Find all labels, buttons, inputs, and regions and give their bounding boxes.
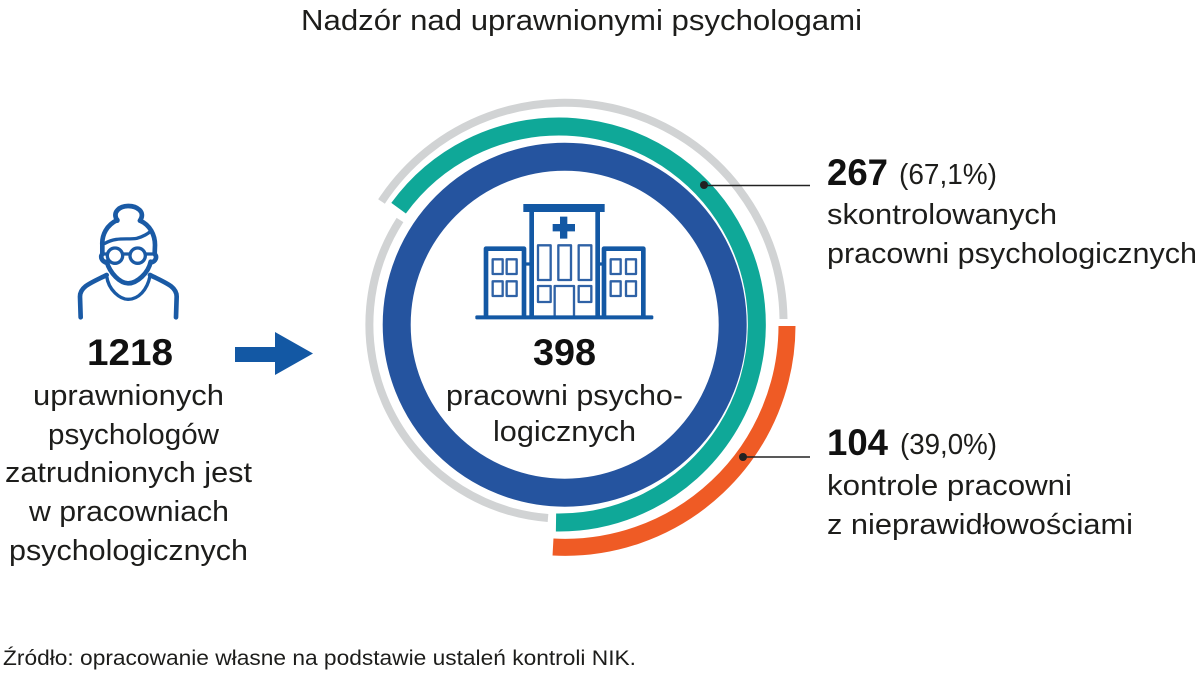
callout: inspected workshops [827,152,1197,270]
callout line: inspected [700,181,810,189]
number: 398: 398 [533,332,596,373]
icon: psychologist [80,206,177,317]
text: description of psychologists: psychologicznych [9,535,248,567]
callout: irregularities: (39,0%) [900,429,997,461]
text: description of psychologists: w pracowniach [28,496,229,528]
callout: inspected workshops: (67,1%) [899,159,997,191]
text: description of psychologists: psychologów [48,419,220,451]
callout line: irregularities [739,453,810,461]
ring: irregularities share [553,326,787,547]
ring: all workshops [397,157,733,493]
text: workshops label: logicznych [493,416,636,448]
callout: irregularities: z nieprawidłowościami [827,509,1133,541]
text: description of psychologists: uprawnionych [33,380,224,412]
arrow [235,332,313,375]
callout: irregularities: 104 [827,422,888,463]
icon: hospital [475,204,653,319]
ring: inspected share [399,127,757,523]
ring: grey remainder left [369,220,548,518]
callout: irregularities [827,422,1133,541]
source note: Źródło: opracowanie własne na podstawie ustaleń kontroli NIK. [3,647,636,670]
ring: grey remainder top [382,103,784,319]
panel: licensed psychologists [5,206,252,567]
text: workshops label [446,380,683,448]
text: description of psychologists [5,380,252,567]
callout: irregularities: kontrole pracowni [827,470,1072,502]
callout: inspected workshops: skontrolowanych [827,199,1057,231]
callout: inspected workshops: 267 [827,152,888,193]
number: 1218: 1218 [87,332,173,373]
chart: concentric rings [369,103,787,547]
text: description of psychologists: zatrudnionych jest [5,457,252,489]
callout: inspected workshops: pracowni psychologicznych [827,238,1197,270]
text: workshops label: pracowni psycho- [446,380,683,412]
title: Nadzór nad uprawnionymi psychologami [301,5,862,37]
